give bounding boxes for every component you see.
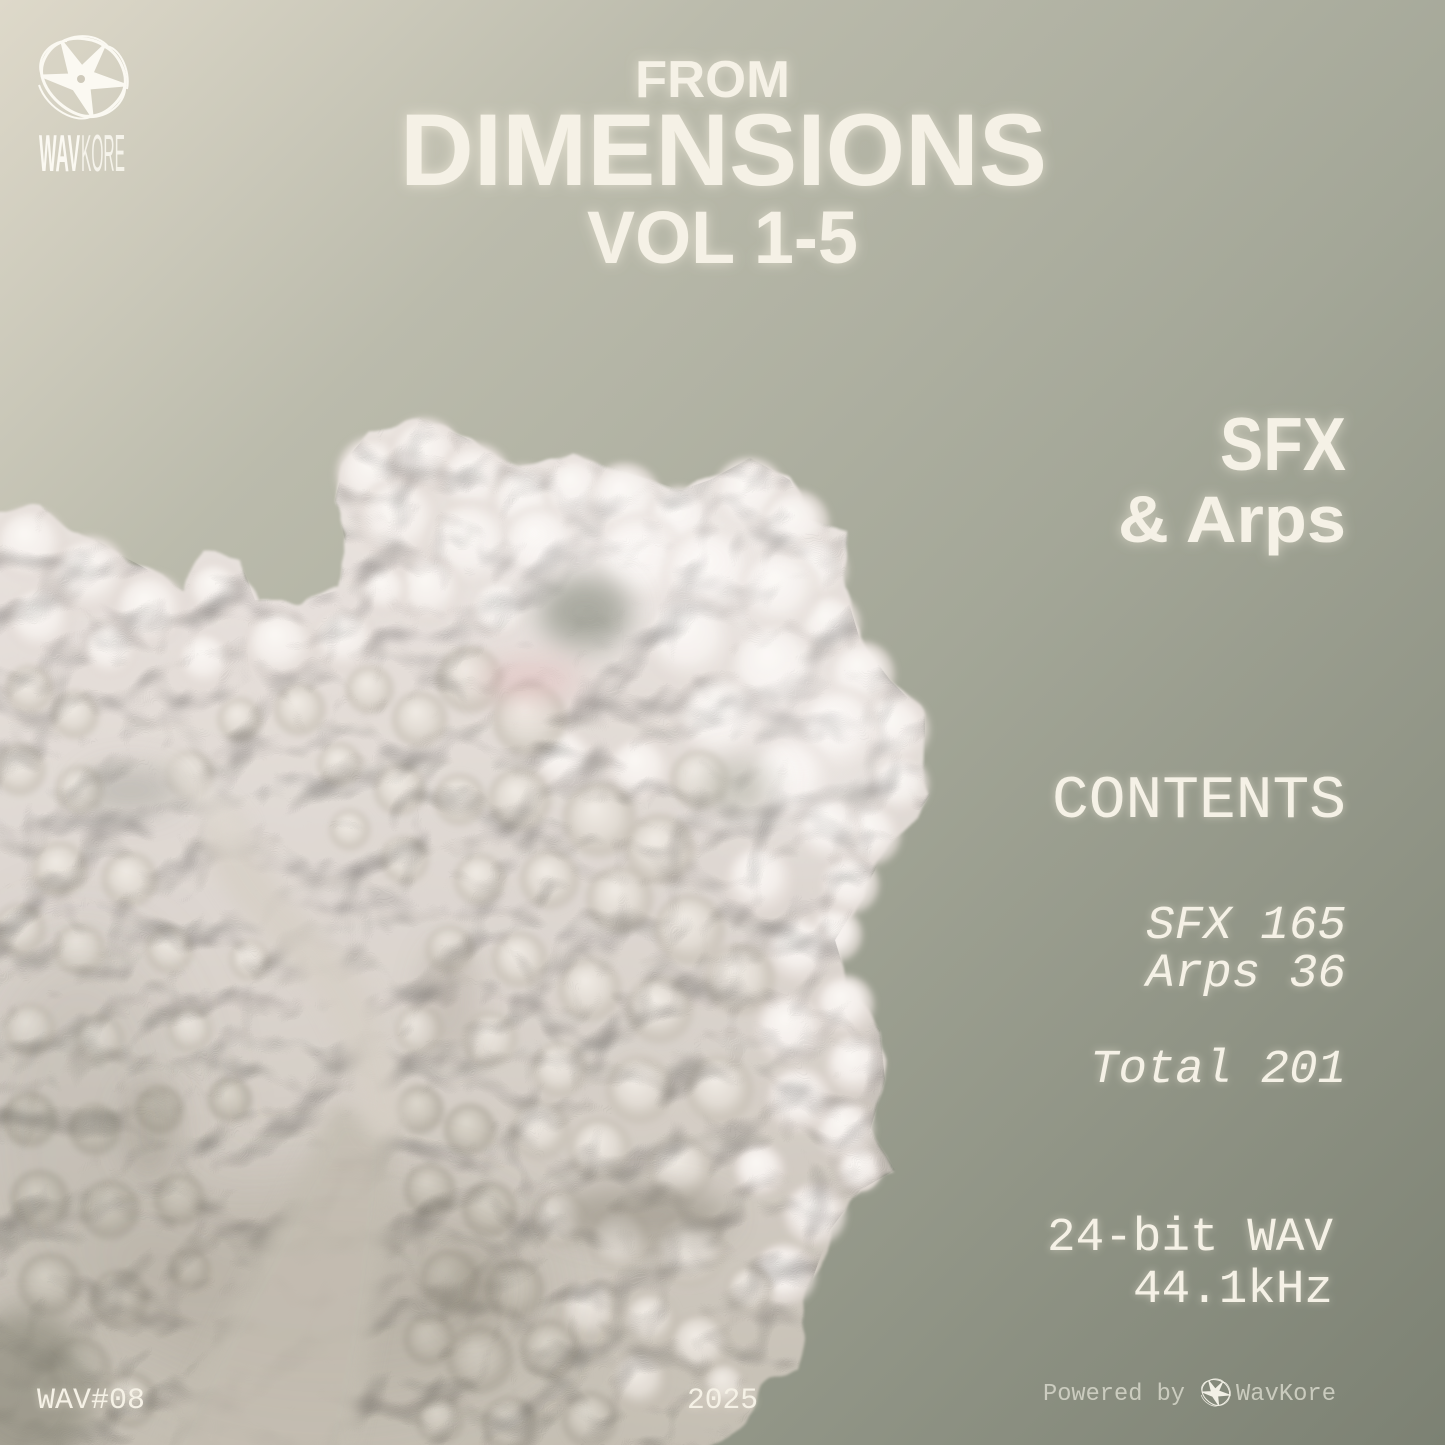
- text: KORE: [81, 125, 125, 183]
- format: 24-bit WAV: 24-bit WAV: [1047, 1211, 1333, 1265]
- heading line: & Arps: & Arps: [1118, 482, 1346, 556]
- heading: SFX & Arps: [1118, 402, 1346, 556]
- footer: Powered by WavKore: Powered by: [1043, 1381, 1185, 1408]
- list item: Total 201: Total 201: [1090, 1043, 1346, 1097]
- list item: SFX 165: SFX 165: [1146, 899, 1346, 953]
- contents heading: CONTENTS: [1052, 768, 1346, 836]
- lighting texture over the cloud: [0, 418, 930, 1445]
- WavKore logo: [39, 36, 128, 183]
- audio format: [1047, 1211, 1333, 1317]
- trunk of the plume: [150, 1105, 395, 1445]
- heading line: SFX: SFX: [1220, 402, 1346, 486]
- title line: FROM: FROM: [635, 51, 790, 109]
- title line: DIMENSIONS: DIMENSIONS: [400, 93, 1047, 207]
- title: From Dimensions Vol 1-5: [400, 51, 1047, 279]
- logo wordmark: WAV: [39, 125, 80, 183]
- catalogue number: WAV#08: [37, 1384, 145, 1418]
- footer: Powered by WavKore: WavKore: [1236, 1381, 1336, 1408]
- cloud image: white ink plume: [0, 415, 932, 1445]
- footer: Powered by WavKore: [1043, 1379, 1336, 1408]
- list item: Arps 36: Arps 36: [1143, 947, 1346, 1001]
- icon: small WavKore mark: [1201, 1379, 1230, 1406]
- title line: VOL 1-5: VOL 1-5: [587, 196, 858, 279]
- contents list: [1090, 899, 1346, 1097]
- icon: WavKore flower mark: [39, 36, 128, 119]
- year: 2025: [687, 1384, 758, 1418]
- format: 44.1kHz: 44.1kHz: [1133, 1263, 1333, 1317]
